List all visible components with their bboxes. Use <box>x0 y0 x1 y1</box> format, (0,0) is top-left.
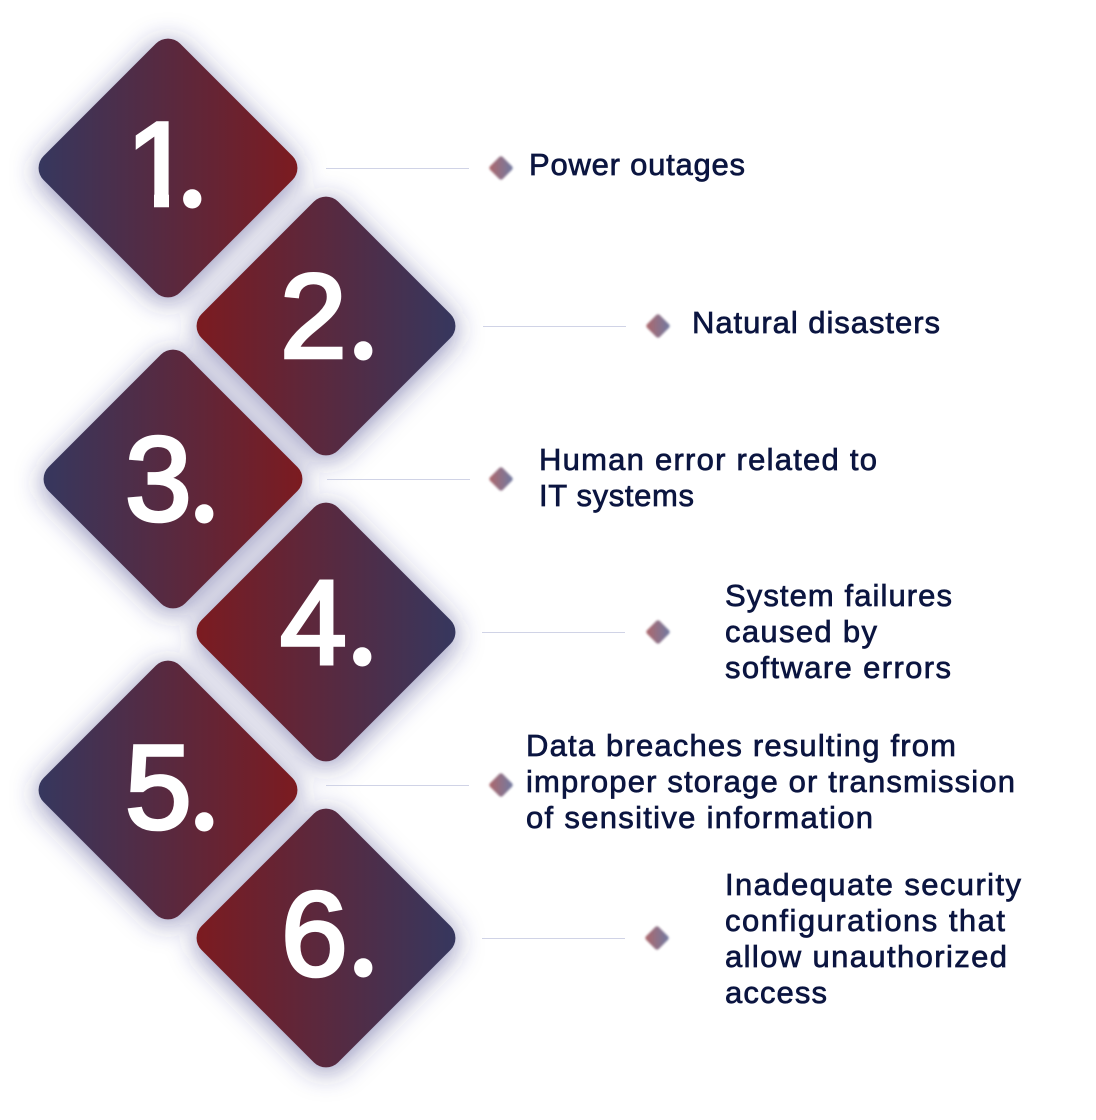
label 4: software errors <box>725 650 951 685</box>
number 2: 2 <box>280 250 347 384</box>
bullet diamond 6 <box>644 925 670 951</box>
diamond 2 <box>190 190 462 462</box>
connector line 4 <box>482 632 625 633</box>
label 4: System failures <box>725 578 952 613</box>
number 1: 1 <box>126 98 193 232</box>
label 3 <box>539 442 877 513</box>
connector line 6 <box>482 938 625 939</box>
number 6: 6 <box>281 868 348 1002</box>
bullet diamond 5 <box>488 772 514 798</box>
label 6: allow unauthorized <box>725 939 1007 974</box>
label 5 <box>526 728 1015 835</box>
label 1: Power outages <box>529 147 745 182</box>
number 4: 4 <box>280 556 347 690</box>
diamond 3 <box>37 343 309 615</box>
item 3: human error <box>37 343 877 615</box>
label 5: Data breaches resulting from <box>526 728 956 763</box>
bullet diamond 2 <box>645 313 671 339</box>
number 1 <box>136 121 202 208</box>
number 6: . <box>347 860 380 1005</box>
label 6: access <box>725 975 827 1010</box>
number 1: . <box>176 91 208 236</box>
diamond 6 <box>190 802 462 1074</box>
number 3: . <box>188 406 220 551</box>
item 1: power outages <box>32 32 745 304</box>
label 6: Inadequate security <box>725 867 1022 902</box>
item 6: inadequate security <box>190 802 1022 1074</box>
number 5: 5 <box>125 720 192 854</box>
number 2: . <box>347 243 380 388</box>
item 4: system failures <box>190 496 952 768</box>
label 4 <box>725 578 952 685</box>
label 5: improper storage or transmission <box>526 764 1015 799</box>
bullet diamond 1 <box>488 155 514 181</box>
label 3: IT systems <box>539 478 694 513</box>
diamond 5 <box>32 654 304 926</box>
connector line 1 <box>326 168 469 169</box>
connector line 2 <box>483 326 626 327</box>
connector line 3 <box>327 479 470 480</box>
connector line 5 <box>326 785 469 786</box>
item 2: natural disasters <box>190 190 940 462</box>
diamond 4 <box>190 496 462 768</box>
label 6: configurations that <box>725 903 1005 938</box>
diamond 1 <box>32 32 304 304</box>
label 5: of sensitive information <box>526 800 873 835</box>
label 2: Natural disasters <box>692 305 940 340</box>
label 3: Human error related to <box>539 442 877 477</box>
number 5: . <box>188 714 220 859</box>
label 4: caused by <box>725 614 878 649</box>
bullet diamond 4 <box>645 619 671 645</box>
number 3: 3 <box>125 412 192 546</box>
number 4: . <box>346 549 378 694</box>
bullet diamond 3 <box>488 466 514 492</box>
label 6 <box>725 867 1022 1010</box>
item 5: data breaches <box>32 654 1015 926</box>
